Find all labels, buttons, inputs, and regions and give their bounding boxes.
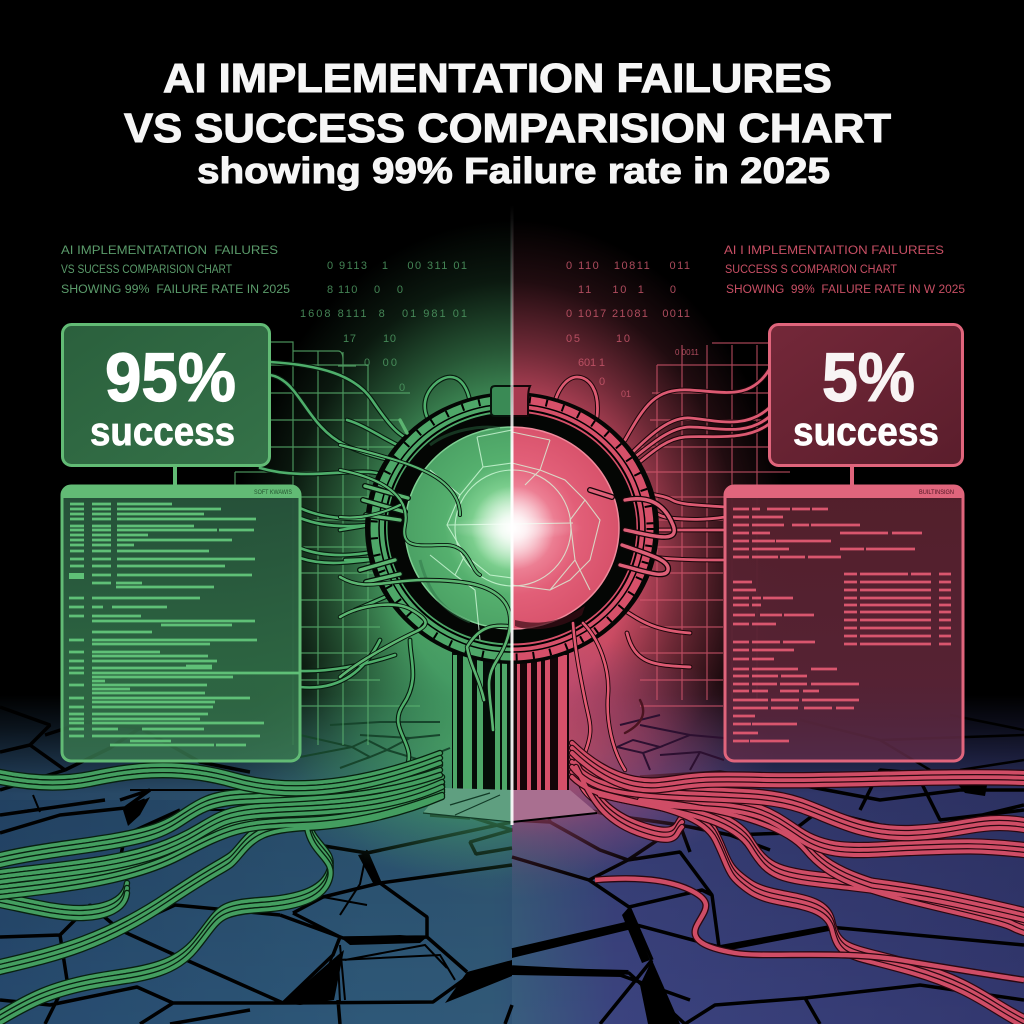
stat box: 95% success bbox=[62, 324, 270, 486]
center glow: green half bbox=[258, 240, 512, 874]
wires: red upper bbox=[553, 370, 769, 667]
stat box: 95% success: 95% bbox=[105, 339, 236, 416]
list rows: green bbox=[69, 504, 300, 745]
title: showing 99% Failure rate in 2025 bbox=[197, 150, 830, 191]
small heading: green: VS SUCESS COMPARISION CHART bbox=[61, 264, 232, 276]
small heading: red: SUCCESS S COMPARION CHART bbox=[725, 264, 897, 276]
binary digits: red: 05 10 bbox=[566, 333, 630, 345]
binary digits: green: 1608 8111 8 01 981 01 bbox=[300, 308, 467, 320]
small heading: red bbox=[724, 245, 965, 296]
small heading: green: AI IMPLEMENTATATION FAILURES bbox=[61, 245, 278, 257]
data panel: green: SOFT KWAWIS bbox=[254, 490, 292, 496]
binary digits: red: 0 1017 21081 0011 bbox=[566, 308, 690, 320]
title: VS SUCCESS COMPARISION CHART bbox=[124, 105, 891, 151]
binary digits: red: 11 10 1 0 bbox=[578, 284, 676, 296]
binary digits: red bbox=[566, 260, 699, 399]
center glow: red half bbox=[512, 235, 771, 880]
binary digits: green: 8 110 0 0 bbox=[327, 284, 403, 296]
binary digits: red: 0 bbox=[599, 376, 605, 388]
binary digits: red: 0 0011 bbox=[675, 348, 699, 357]
data panel: green bbox=[62, 486, 300, 761]
data panel: red: BUILTINSIGN bbox=[919, 490, 954, 496]
binary digits: red: 0 110 10811 011 bbox=[566, 260, 690, 272]
grid: red side bbox=[640, 343, 790, 706]
binary digits: green bbox=[300, 260, 467, 394]
small heading: green bbox=[61, 245, 290, 296]
title bbox=[124, 55, 891, 191]
binary digits: green: 0 9113 1 00 311 01 bbox=[327, 260, 467, 272]
stat box: 5% success: success bbox=[793, 410, 939, 454]
wires: green upper bbox=[260, 362, 470, 770]
binary digits: red: 601 1 bbox=[578, 357, 605, 369]
grid: green side bbox=[235, 342, 420, 745]
floor reflection bbox=[248, 658, 753, 872]
mechanical ring: red half bbox=[512, 393, 659, 664]
floor tiles near tower bbox=[300, 722, 450, 772]
cracked floor bbox=[0, 695, 1024, 1024]
title: AI IMPLEMENTATION FAILURES bbox=[163, 55, 832, 101]
tower below orb: green bbox=[423, 640, 512, 822]
small heading: green: SHOWING 99% FAILURE RATE IN 2025 bbox=[61, 284, 290, 296]
binary digits: red: 01 bbox=[621, 389, 631, 399]
stat box: 95% success: success bbox=[90, 410, 235, 454]
central white glow bbox=[443, 486, 583, 570]
mechanical ring: green half bbox=[365, 394, 512, 664]
binary digits: green: 0 00 bbox=[364, 357, 397, 369]
center divider line bbox=[510, 205, 514, 825]
glass orb bbox=[405, 427, 619, 640]
tower below orb: red bbox=[512, 640, 597, 822]
stat box: 5% success bbox=[770, 324, 962, 486]
floor cables: green bbox=[0, 753, 442, 1023]
binary digits: green: 17 10 bbox=[343, 333, 396, 345]
small heading: red: SHOWING 99% FAILURE RATE IN W 2025 bbox=[726, 284, 965, 296]
list rows: red bbox=[733, 509, 951, 741]
orb cracks bbox=[430, 430, 600, 640]
binary digits: green: 0 bbox=[399, 382, 405, 394]
stat box: 5% success: 5% bbox=[822, 339, 915, 416]
clamps and wires over ring: red bbox=[512, 386, 674, 810]
clamps and wires over ring: green bbox=[340, 386, 512, 730]
data panel: red bbox=[725, 486, 963, 761]
small heading: red: AI I IMPLEMENTAITION FAILUREES bbox=[724, 245, 944, 257]
floor cables: red bbox=[572, 743, 1024, 1024]
